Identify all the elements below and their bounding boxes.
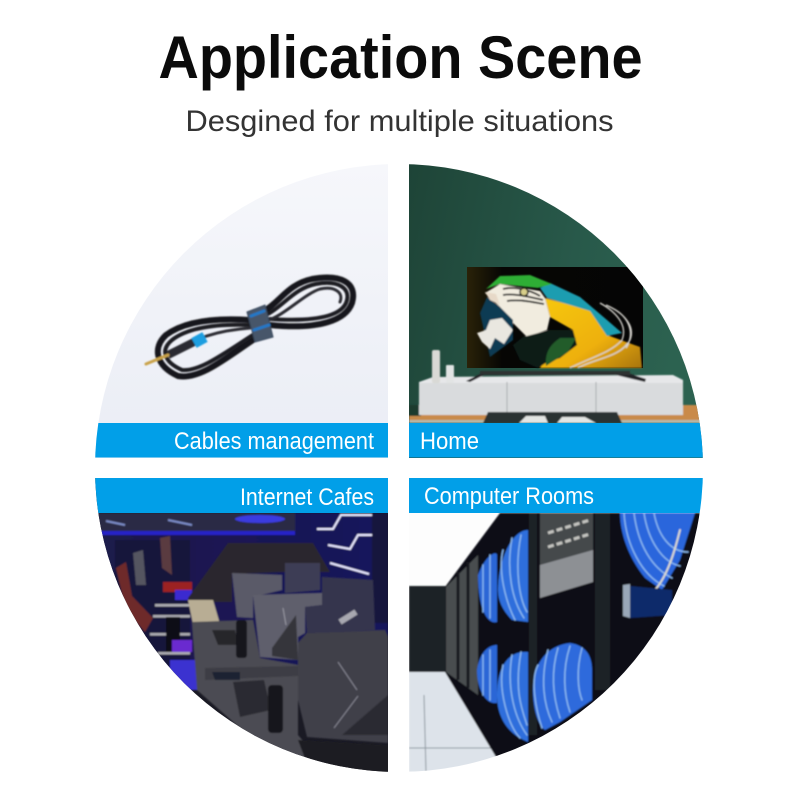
gaming chairs [115, 540, 190, 667]
pc tower: back [232, 573, 282, 618]
server racks [445, 513, 703, 772]
neon wall lights [317, 515, 373, 574]
label band: home [409, 423, 703, 458]
title: Application Scene [158, 24, 642, 91]
pc tower: middle [253, 593, 322, 660]
floor [409, 405, 703, 423]
label band: computer rooms [409, 478, 703, 513]
dark monitor hood [188, 543, 330, 602]
server unit [538, 549, 594, 600]
rack bracket [623, 584, 630, 618]
label band: internet cafes: Internet Cafes [240, 484, 374, 511]
subtitle: Desgined for multiple situations [186, 105, 614, 138]
icon: coiled audio cable [146, 278, 353, 376]
label band: internet cafes [95, 478, 388, 513]
desk [188, 600, 220, 624]
parrot beak [480, 297, 513, 357]
panel: computer rooms [409, 478, 703, 772]
pc tower: front [298, 630, 388, 743]
icon: tv with parrot [467, 267, 643, 368]
keyboards and headsets [212, 630, 238, 645]
label band: cables management: Cables management [174, 428, 374, 455]
flower [477, 318, 513, 349]
panel: home [409, 164, 703, 458]
floor [409, 672, 505, 772]
back wall [409, 586, 446, 672]
icon: tv cabinet [419, 350, 683, 423]
label band: cables management [95, 423, 388, 458]
monitor [305, 577, 375, 633]
panel: internet cafes [95, 478, 388, 772]
blue cable bunches [477, 513, 695, 742]
ceiling [95, 513, 295, 532]
rack fronts [446, 555, 478, 695]
label band: home: Home [420, 428, 479, 455]
icon: tv stand [466, 372, 646, 382]
label band: computer rooms: Computer Rooms [424, 483, 594, 510]
panel: cables management [95, 164, 388, 458]
parrot body [540, 298, 642, 368]
